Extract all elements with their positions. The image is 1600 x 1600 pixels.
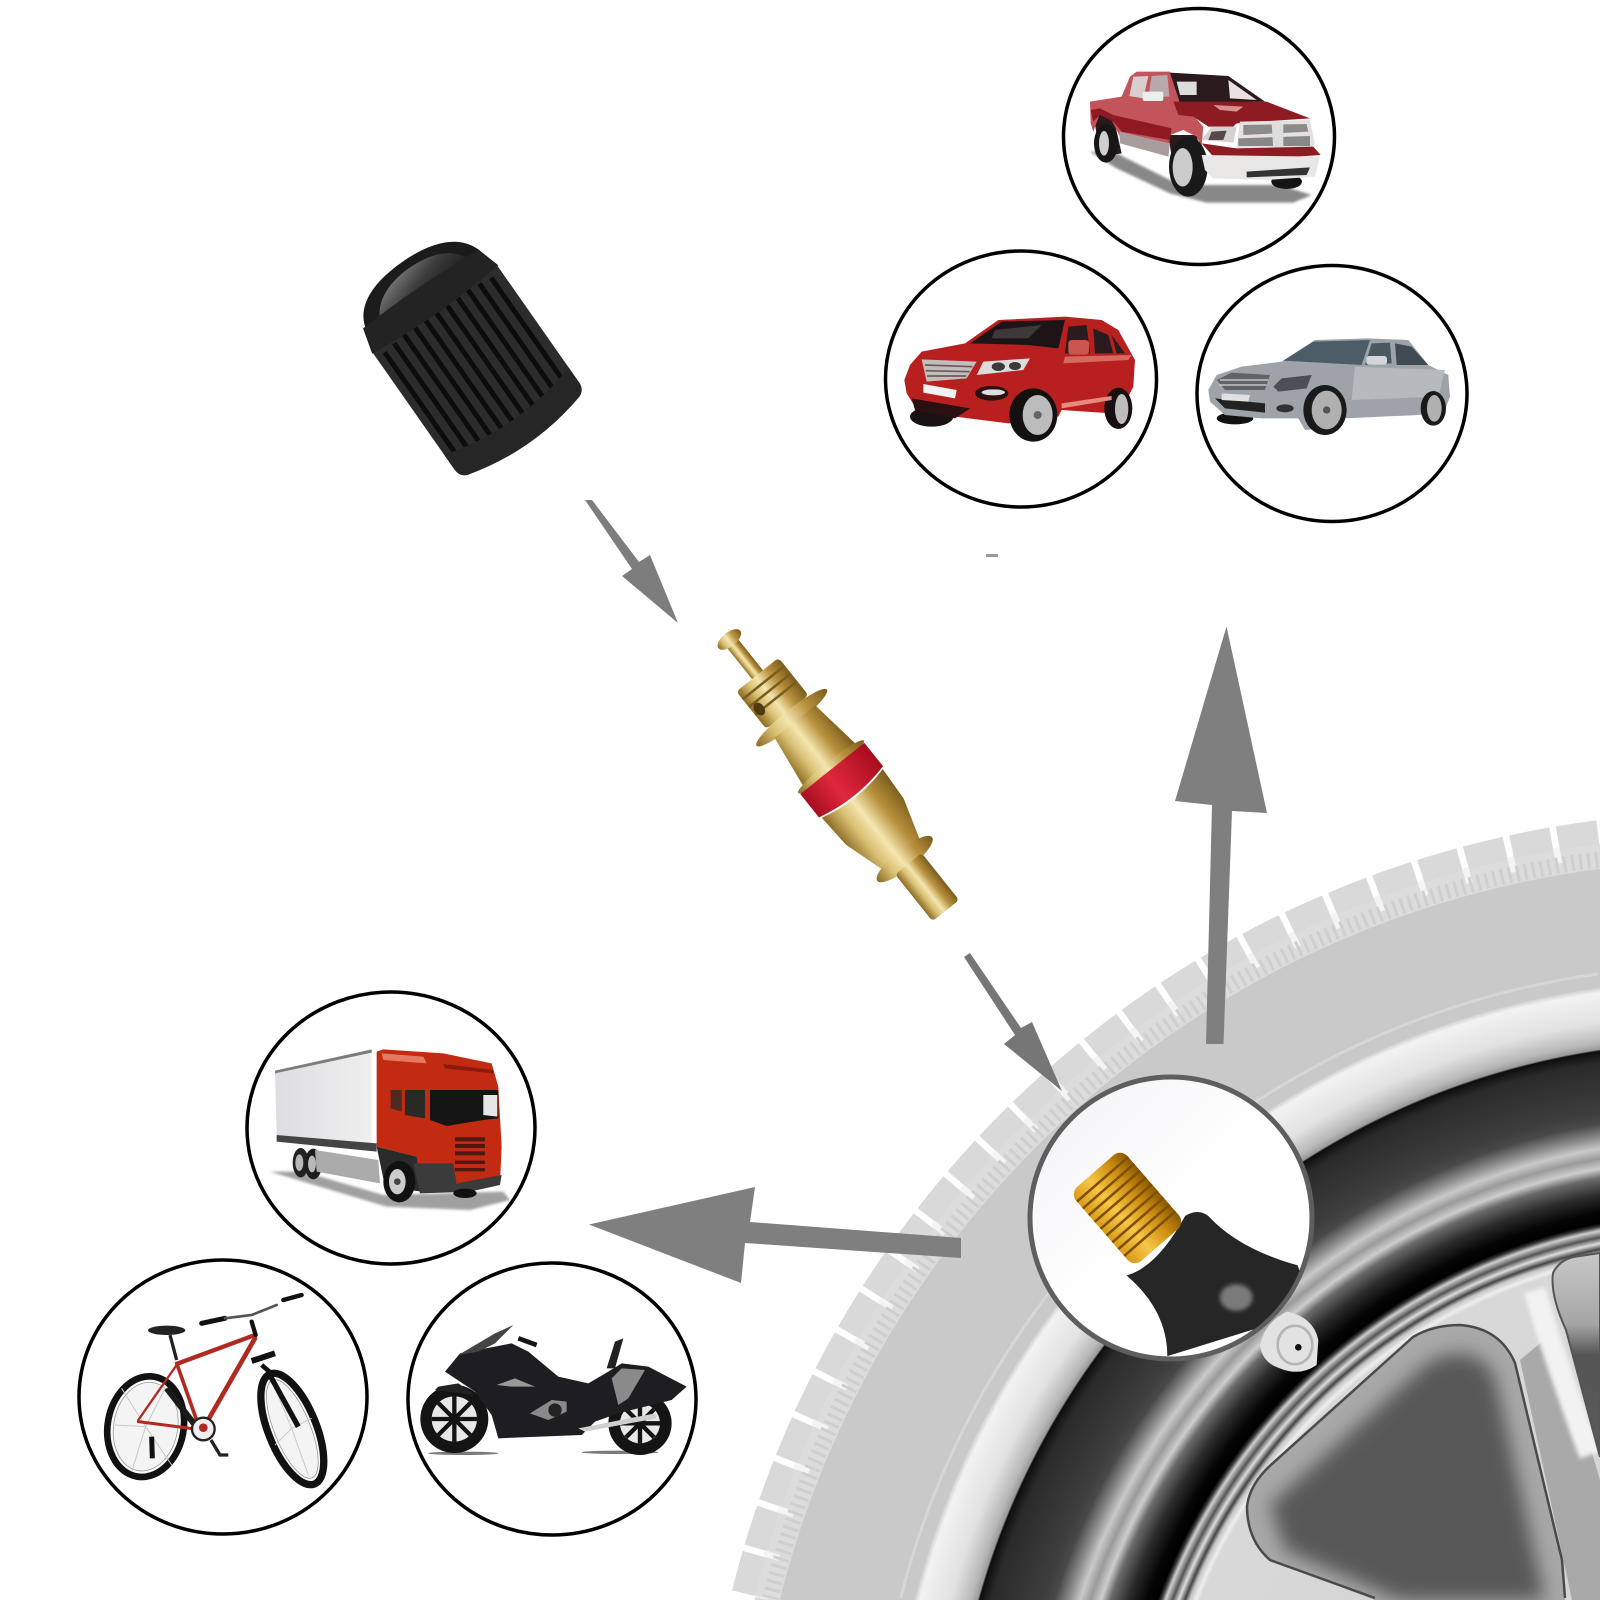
core body — [768, 700, 858, 788]
sidewall inner highlight — [901, 974, 1598, 1598]
speck — [986, 554, 998, 557]
circle: silver sedan — [1197, 266, 1467, 522]
valve gold thread — [1074, 1152, 1182, 1264]
bicycle drawing — [99, 1295, 337, 1493]
cap ribbed body — [371, 263, 591, 487]
tire valve stub — [1260, 1312, 1318, 1372]
core pin head — [714, 625, 745, 654]
rear triangle dark chain stay — [167, 1388, 195, 1425]
cap bottom skirt — [444, 368, 591, 487]
front wheel — [420, 1385, 488, 1453]
bodywork — [445, 1343, 687, 1438]
fork — [252, 1353, 275, 1361]
valve rubber base — [1127, 1212, 1315, 1356]
circle: black motorcycle — [408, 1263, 696, 1535]
motorcycle drawing — [420, 1325, 687, 1455]
circle: pickup truck — [1064, 8, 1334, 264]
chainring and crank — [192, 1418, 215, 1440]
core tail flange — [871, 829, 938, 889]
arrow: up to cars — [1175, 626, 1267, 1044]
car wheel with tire — [726, 832, 1600, 1600]
arrow: valve core to wheel — [964, 953, 1062, 1091]
core red seal — [800, 743, 886, 821]
tire tread blocks — [743, 832, 1598, 1598]
tire sidewall — [726, 836, 1600, 1600]
front fender — [435, 1383, 475, 1395]
icon: brass valve core — [690, 606, 981, 939]
rear wheel — [99, 1370, 192, 1483]
core pin — [725, 636, 768, 685]
core threaded neck — [736, 658, 808, 729]
cap dome highlight — [363, 236, 475, 329]
cap top ring — [356, 243, 501, 357]
rim barrel and lip rings — [885, 978, 1600, 1600]
circle: rubber valve stem close-up — [1030, 1077, 1315, 1359]
circle: red SUV — [886, 251, 1156, 507]
truck drawing — [270, 1049, 510, 1210]
right wheel window — [1553, 1253, 1600, 1457]
arrow: cap to valve core — [585, 500, 678, 623]
core upper flange — [752, 683, 832, 752]
main wheel window — [1240, 1320, 1570, 1600]
rear wheel — [608, 1392, 672, 1455]
tread grooves — [760, 849, 1600, 1598]
handlebar — [202, 1295, 302, 1335]
circle: red box truck — [247, 992, 535, 1264]
cap dome back — [345, 222, 491, 348]
icon: black valve dust cap — [339, 218, 592, 487]
frame — [138, 1335, 255, 1430]
front wheel — [248, 1365, 337, 1493]
SUV drawing — [904, 317, 1135, 442]
core lower collar — [794, 736, 868, 798]
pickup drawing — [1090, 72, 1321, 203]
core side hole — [751, 700, 768, 718]
rim spoke face — [1240, 1253, 1600, 1600]
sedan drawing — [1208, 338, 1450, 435]
circle: mountain bicycle — [79, 1260, 367, 1534]
saddle and seat post — [148, 1326, 185, 1335]
arrow: left to truck and bikes — [589, 1187, 961, 1283]
core barrel — [822, 769, 931, 879]
core tail tip — [895, 853, 959, 921]
